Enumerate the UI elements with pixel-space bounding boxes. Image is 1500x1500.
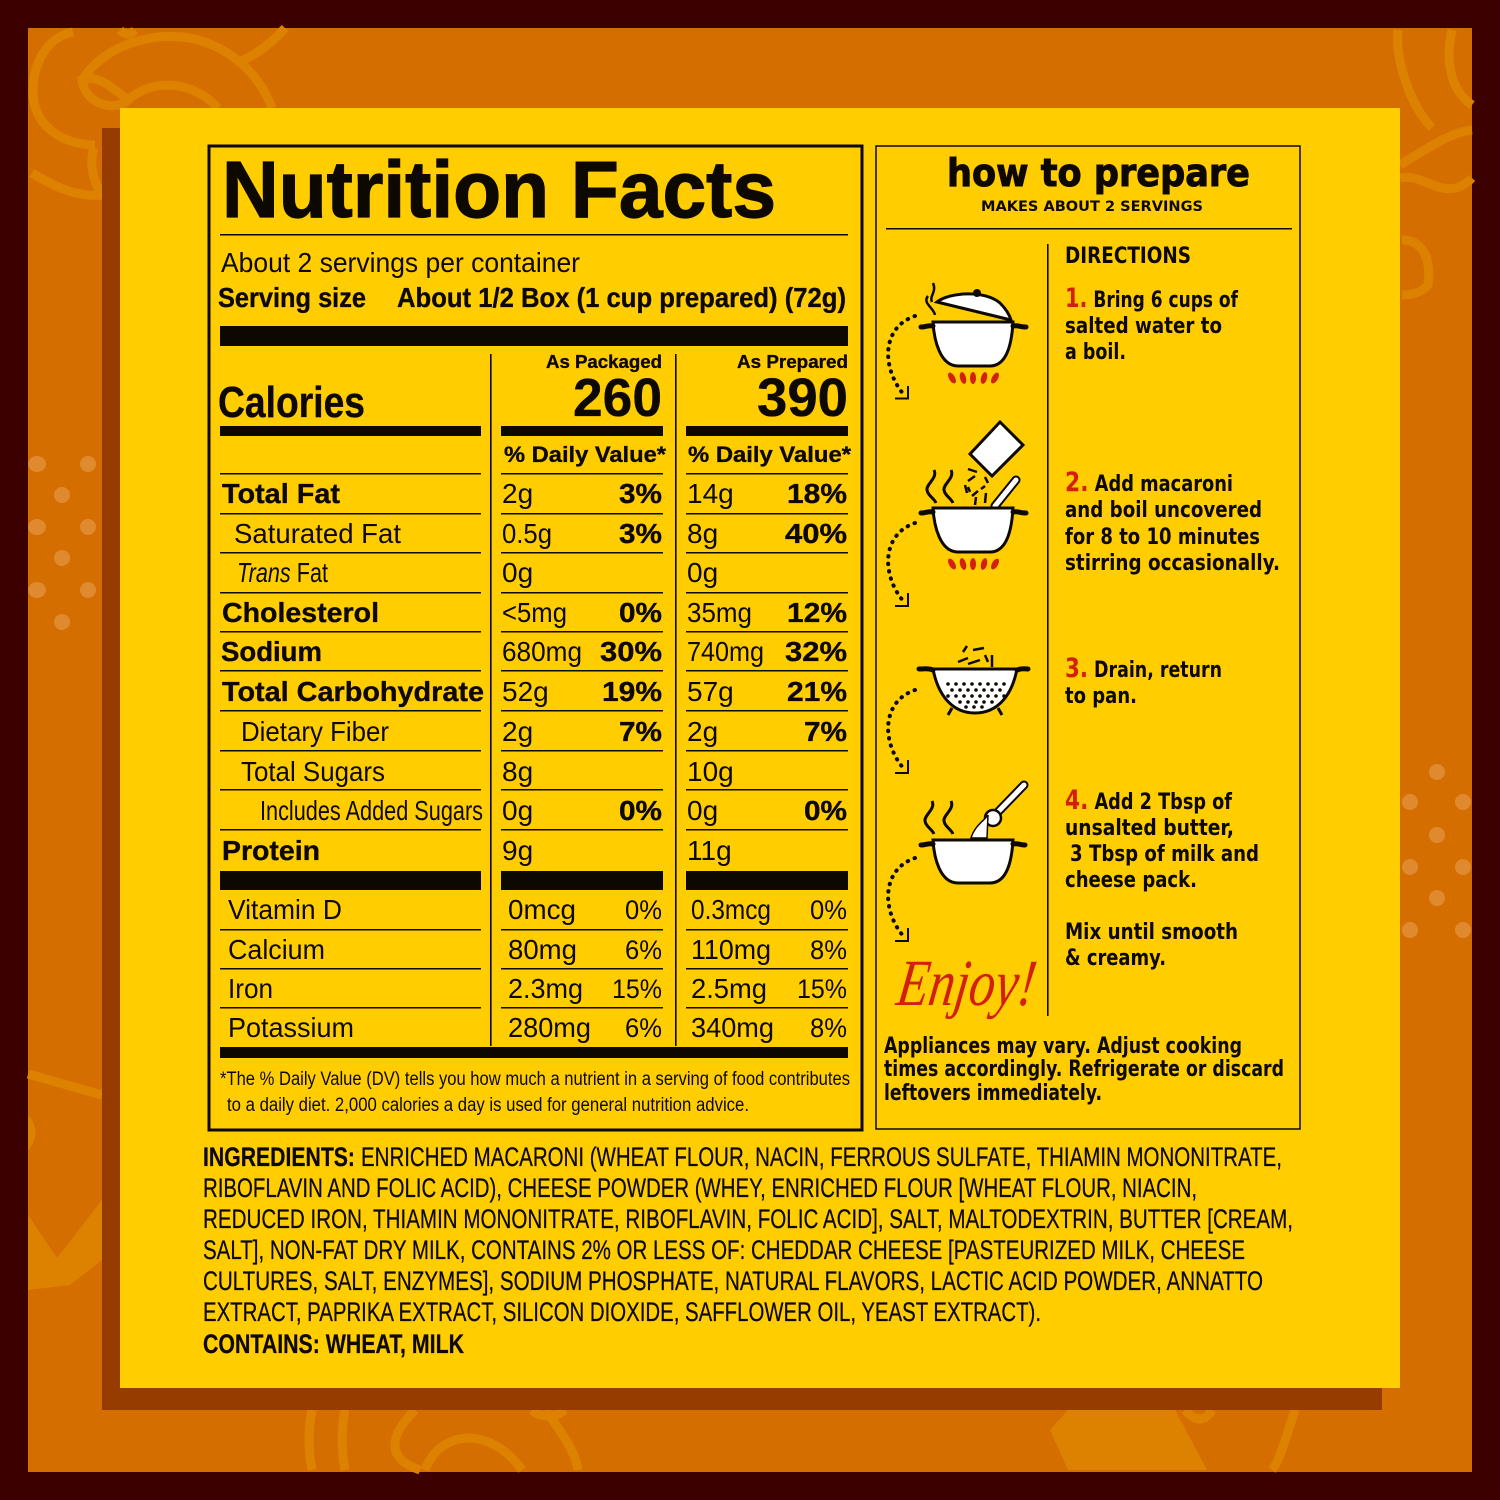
serving size: Serving size bbox=[218, 282, 366, 313]
row: vitamin d: Vitamin D bbox=[228, 894, 342, 925]
directions title: DIRECTIONS bbox=[1065, 244, 1191, 269]
row: total carbohydrate: 57g bbox=[687, 676, 734, 707]
ingredients text block bbox=[203, 1142, 1293, 1359]
row: vitamin d: 0% bbox=[625, 895, 662, 925]
row: potassium: 280mg bbox=[508, 1012, 591, 1043]
row: iron: 2.3mg bbox=[508, 973, 583, 1004]
arrow: dotted 1 bbox=[888, 316, 915, 398]
row: sodium: Sodium bbox=[221, 636, 322, 667]
servings per container: About 2 servings per container bbox=[221, 247, 580, 278]
row: vitamin d bbox=[228, 894, 847, 925]
row: calcium: 6% bbox=[625, 935, 662, 965]
row: total carbohydrate: 21% bbox=[787, 676, 847, 707]
step 2 text: 2. Add macaroni bbox=[1065, 467, 1233, 498]
row: potassium: 340mg bbox=[691, 1012, 774, 1043]
row: iron: 15% bbox=[797, 974, 847, 1004]
row: iron: 15% bbox=[612, 974, 662, 1004]
row: potassium: 6% bbox=[625, 1013, 662, 1043]
row: sodium: 30% bbox=[600, 636, 662, 667]
row: protein bbox=[222, 835, 732, 866]
row: total fat: 14g bbox=[687, 478, 734, 509]
step 1 text: 1. Bring 6 cups of bbox=[1065, 283, 1238, 314]
appliance note: leftovers immediately. bbox=[884, 1081, 1102, 1106]
column dividers bbox=[490, 354, 677, 1046]
calories bars bbox=[220, 426, 848, 436]
column headers and calories: As Prepared bbox=[737, 352, 848, 372]
step 1 text: a boil. bbox=[1065, 340, 1126, 365]
row: total fat bbox=[222, 478, 847, 509]
row: added sugars: 0% bbox=[804, 795, 847, 826]
panel: how to prepare bbox=[876, 146, 1300, 1129]
heading bbox=[947, 151, 1250, 215]
daily value headers: % Daily Value* bbox=[504, 442, 666, 467]
protein bars bbox=[220, 871, 848, 890]
row: protein: 11g bbox=[687, 835, 732, 866]
arrow: dotted 2 bbox=[888, 523, 915, 606]
row: calcium: 80mg bbox=[508, 934, 577, 965]
ingredients text block: EXTRACT, PAPRIKA EXTRACT, SILICON DIOXIDE, SAFFLOWER OIL, YEAST EXTRACT). bbox=[203, 1297, 1041, 1327]
step 2 text bbox=[1065, 467, 1280, 576]
row: iron: Iron bbox=[228, 973, 273, 1004]
column headers and calories: As Packaged bbox=[546, 352, 662, 372]
thick bar bbox=[220, 326, 848, 346]
row: cholesterol: 12% bbox=[787, 597, 847, 628]
row: potassium: 8% bbox=[810, 1013, 847, 1043]
row: dietary fiber: 7% bbox=[619, 716, 662, 747]
background dots right bbox=[1402, 764, 1471, 938]
column headers and calories: 390 bbox=[757, 368, 848, 428]
ingredients text block: CONTAINS: WHEAT, MILK bbox=[203, 1329, 464, 1359]
step 3 text bbox=[1065, 653, 1222, 709]
heading: MAKES ABOUT 2 SERVINGS bbox=[981, 199, 1203, 215]
row: added sugars: 0g bbox=[502, 795, 533, 826]
background filled macaroni shapes bbox=[28, 1115, 1207, 1470]
step 4 text: Mix until smooth bbox=[1065, 920, 1238, 945]
step 4 text bbox=[1065, 785, 1259, 971]
row: total sugars: 8g bbox=[502, 756, 533, 787]
row: vitamin d: 0.3mcg bbox=[691, 894, 771, 925]
row: calcium: 8% bbox=[810, 935, 847, 965]
row: added sugars: 0% bbox=[619, 795, 662, 826]
row: dietary fiber bbox=[241, 716, 847, 747]
step 2 text: and boil uncovered bbox=[1065, 498, 1262, 523]
step 1 text bbox=[1065, 283, 1238, 365]
row: trans fat: 0g bbox=[687, 557, 718, 588]
heading: how to prepare bbox=[947, 151, 1250, 195]
column headers and calories: Calories bbox=[218, 378, 365, 427]
row: trans fat: Trans Fat bbox=[237, 557, 328, 588]
row: saturated fat: 40% bbox=[785, 518, 847, 549]
footnote bbox=[220, 1069, 850, 1116]
row: total carbohydrate: 52g bbox=[502, 676, 549, 707]
enjoy script: Enjoy! bbox=[892, 947, 1041, 1020]
daily value headers: % Daily Value* bbox=[688, 442, 851, 467]
row: trans fat bbox=[237, 557, 718, 588]
row: calcium bbox=[228, 934, 847, 965]
row: potassium bbox=[228, 1012, 847, 1043]
row: vitamin d: 0mcg bbox=[508, 894, 576, 925]
row: total fat: Total Fat bbox=[222, 478, 340, 509]
footnote: *The % Daily Value (DV) tells you how much a nutrient in a serving of food contributes bbox=[220, 1069, 850, 1090]
row: added sugars bbox=[260, 795, 847, 826]
panel: nutrition facts bbox=[209, 145, 862, 1130]
step 4 text: 3 Tbsp of milk and bbox=[1070, 842, 1259, 867]
row: added sugars: Includes Added Sugars bbox=[260, 795, 483, 826]
yellow card bbox=[120, 108, 1400, 1388]
row: saturated fat: Saturated Fat bbox=[234, 518, 401, 549]
icon: pot with macaroni bbox=[921, 469, 1026, 571]
row: dietary fiber: 2g bbox=[502, 716, 533, 747]
appliance note bbox=[884, 1034, 1284, 1106]
row: dietary fiber: 2g bbox=[687, 716, 718, 747]
row: cholesterol: <5mg bbox=[502, 597, 567, 628]
step 2 text: for 8 to 10 minutes bbox=[1065, 525, 1260, 550]
row: total carbohydrate bbox=[222, 676, 847, 707]
row: dietary fiber: Dietary Fiber bbox=[241, 716, 389, 747]
icon: pot with stirring fork bbox=[921, 785, 1025, 883]
column headers and calories bbox=[218, 352, 848, 428]
serving size: About 1/2 Box (1 cup prepared) (72g) bbox=[397, 282, 846, 313]
step 4 text: unsalted butter, bbox=[1065, 816, 1234, 841]
row: total carbohydrate: 19% bbox=[602, 676, 662, 707]
row: saturated fat: 3% bbox=[619, 518, 662, 549]
row: total sugars: 10g bbox=[687, 756, 734, 787]
column headers and calories: 260 bbox=[573, 368, 662, 428]
row: iron bbox=[228, 973, 847, 1004]
row: sodium: 680mg bbox=[502, 636, 582, 667]
row: total carbohydrate: Total Carbohydrate bbox=[222, 676, 484, 707]
row: total fat: 18% bbox=[787, 478, 847, 509]
row: iron: 2.5mg bbox=[691, 973, 767, 1004]
row: dietary fiber: 7% bbox=[804, 716, 847, 747]
footnote: to a daily diet. 2,000 calories a day is used for general nutrition advice. bbox=[227, 1095, 749, 1116]
row: protein: 9g bbox=[502, 835, 533, 866]
step 1 text: salted water to bbox=[1065, 314, 1222, 339]
row: cholesterol: 35mg bbox=[687, 597, 752, 628]
card shadow bbox=[102, 128, 1382, 1410]
row: cholesterol: Cholesterol bbox=[222, 597, 379, 628]
ingredients text block: INGREDIENTS: bbox=[203, 1142, 355, 1172]
row: saturated fat: 0.5g bbox=[502, 518, 552, 549]
appliance note: times accordingly. Refrigerate or discard bbox=[884, 1057, 1284, 1082]
row: calcium: 110mg bbox=[691, 934, 771, 965]
row: saturated fat bbox=[234, 518, 847, 549]
row separators bbox=[220, 473, 848, 1008]
title rule bbox=[220, 234, 848, 236]
step 2 text: stirring occasionally. bbox=[1065, 551, 1280, 576]
step 4 text: cheese pack. bbox=[1065, 868, 1197, 893]
row: vitamin d: 0% bbox=[810, 895, 847, 925]
background dots left bbox=[28, 456, 96, 630]
row: total sugars: Total Sugars bbox=[241, 756, 385, 787]
step 4 text: 4. Add 2 Tbsp of bbox=[1065, 785, 1232, 816]
row: calcium: Calcium bbox=[228, 934, 325, 965]
row: total fat: 3% bbox=[619, 478, 662, 509]
step 3 text: 3. Drain, return bbox=[1065, 653, 1222, 684]
icon: pot with lid bbox=[921, 283, 1026, 385]
icon: colander bbox=[919, 646, 1028, 715]
step 4 text: & creamy. bbox=[1065, 946, 1166, 971]
row: protein: Protein bbox=[222, 835, 320, 866]
bottom bar bbox=[220, 1047, 848, 1058]
row: potassium: Potassium bbox=[228, 1012, 354, 1043]
ingredients text block: RIBOFLAVIN AND FOLIC ACID), CHEESE POWDER (WHEY, ENRICHED FLOUR [WHEAT FLOUR, NIACIN, bbox=[203, 1173, 1197, 1203]
icon: packet bbox=[970, 422, 1023, 476]
arrow: dotted 4 bbox=[888, 858, 915, 941]
row: added sugars: 0g bbox=[687, 795, 718, 826]
appliance note: Appliances may vary. Adjust cooking bbox=[884, 1034, 1242, 1059]
serving size bbox=[218, 282, 846, 313]
daily value headers bbox=[504, 442, 851, 467]
row: sodium bbox=[221, 636, 847, 667]
row: trans fat: 0g bbox=[502, 557, 533, 588]
row: total sugars bbox=[241, 756, 734, 787]
row: sodium: 740mg bbox=[687, 636, 764, 667]
row: cholesterol bbox=[222, 597, 847, 628]
step 3 text: to pan. bbox=[1065, 684, 1137, 709]
row: sodium: 32% bbox=[785, 636, 847, 667]
row: cholesterol: 0% bbox=[619, 597, 662, 628]
row: total fat: 2g bbox=[502, 478, 533, 509]
heading rule bbox=[886, 228, 1292, 230]
row: saturated fat: 8g bbox=[687, 518, 718, 549]
directions divider bbox=[1047, 244, 1049, 1016]
arrow: dotted 3 bbox=[888, 690, 915, 773]
title: Nutrition Facts bbox=[222, 145, 776, 234]
